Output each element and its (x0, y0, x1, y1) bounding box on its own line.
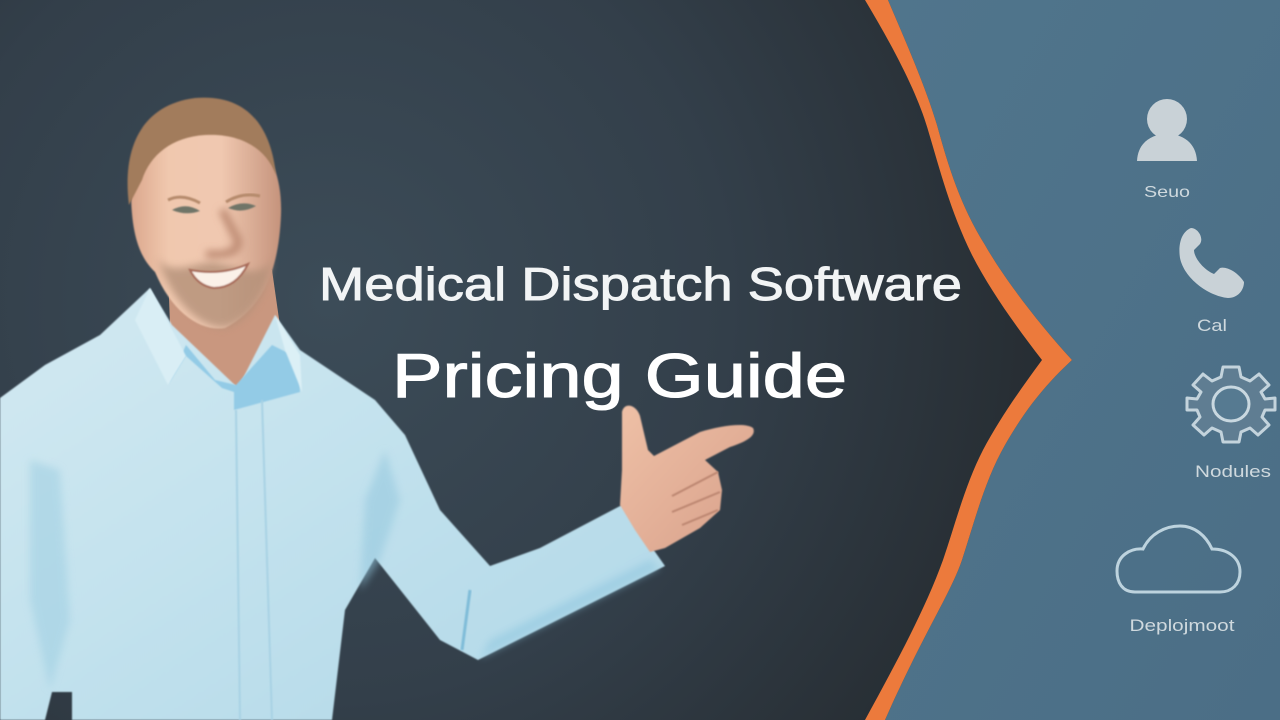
finger creases (672, 472, 720, 525)
smile (190, 264, 248, 288)
hair (128, 98, 276, 205)
panel: right blue panel (885, 0, 1280, 720)
title line 1: Medical Dispatch Software (319, 258, 962, 310)
label: deployment: Deplojmoot (1130, 616, 1235, 635)
nose shading (206, 210, 238, 254)
eyes (172, 203, 256, 213)
beard shading (158, 258, 272, 328)
title (319, 258, 962, 411)
neck (168, 270, 282, 392)
icon: phone (1179, 228, 1244, 298)
title line 2: Pricing Guide (392, 342, 847, 411)
shirt shading (30, 450, 660, 690)
shirt placket (236, 400, 272, 720)
orange wavy divider (865, 0, 1072, 720)
label: modules: Nodules (1195, 462, 1271, 481)
pointing hand (620, 406, 754, 552)
icon: gear (1187, 367, 1275, 442)
label: call: Cal (1197, 316, 1227, 335)
icon: user (1137, 99, 1197, 161)
shirt (0, 288, 665, 720)
head (131, 125, 281, 329)
icon: cloud (1117, 526, 1240, 592)
label: user: Seuo (1144, 184, 1190, 201)
collar (168, 345, 300, 410)
person: man pointing (0, 98, 754, 720)
